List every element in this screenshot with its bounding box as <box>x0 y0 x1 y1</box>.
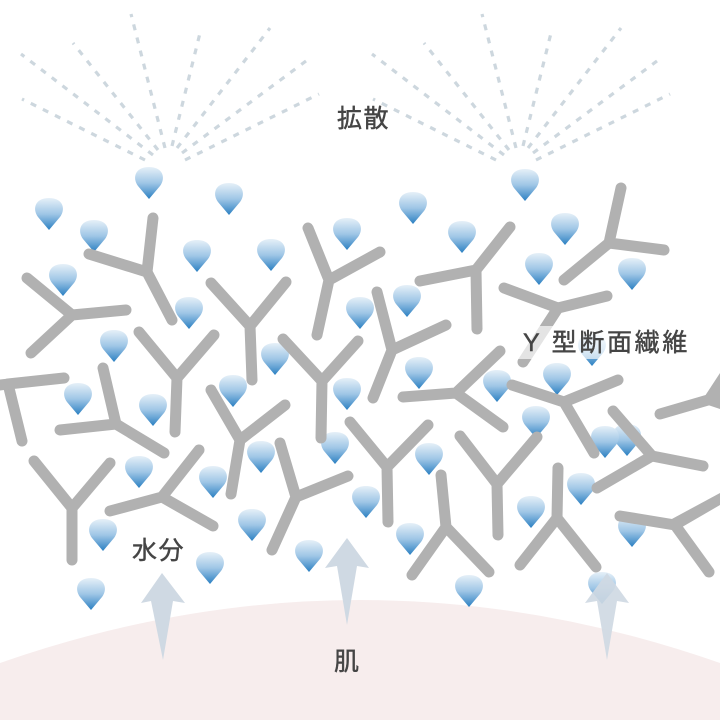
label: moisture: 水分 <box>132 537 185 565</box>
diffusion rays: left fan <box>21 14 319 160</box>
diffusion rays: right fan <box>372 14 670 160</box>
skin surface <box>0 600 720 720</box>
arrow: left moisture <box>141 573 185 660</box>
arrow: centre moisture <box>325 538 369 625</box>
fibers running off the page edges <box>0 373 720 530</box>
Y-shaped cross-section fibers <box>8 188 709 575</box>
label: Y-shaped cross-section fiber: Y 型断面繊維 <box>523 329 690 357</box>
arrow: right moisture <box>585 573 629 660</box>
label: skin: 肌 <box>334 648 361 676</box>
label: diffusion: 拡散 <box>337 105 390 133</box>
label backing <box>518 326 692 359</box>
water droplets <box>35 167 646 610</box>
